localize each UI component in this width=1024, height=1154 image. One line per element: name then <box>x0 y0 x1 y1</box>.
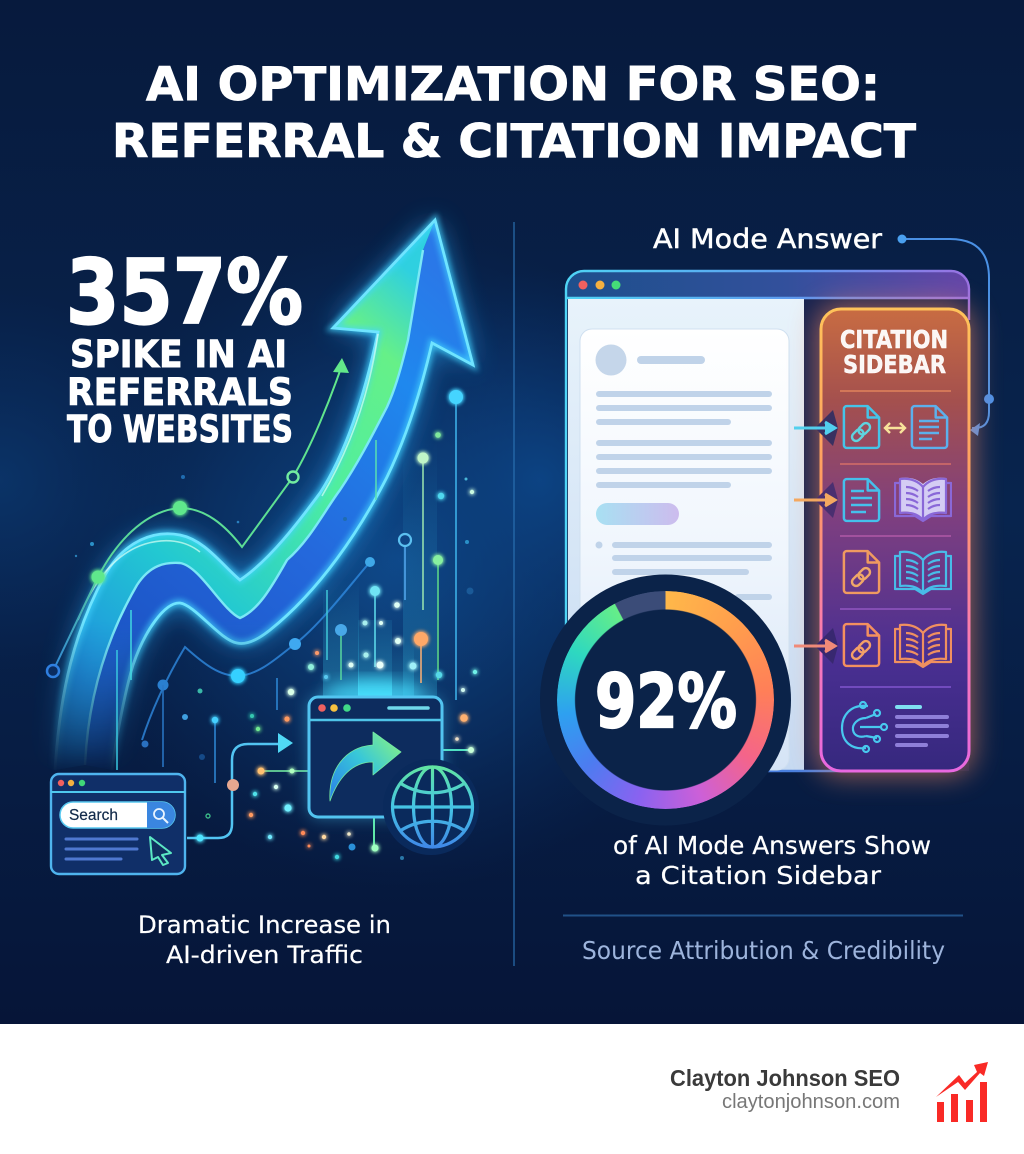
stat: 357%: REFERRALS <box>67 371 293 414</box>
source text lines <box>895 705 949 747</box>
thin trend line with nodes <box>47 358 349 677</box>
label: dramatic increase: AI-driven Traffic <box>166 941 363 969</box>
browser window with redirect arrow <box>309 697 442 817</box>
donut chart: 92%: 92% <box>595 659 737 745</box>
stat: 357%: SPIKE IN AI <box>70 333 287 376</box>
panel: citation sidebar <box>817 305 973 775</box>
answer panel <box>566 299 900 771</box>
title: REFERRAL & CITATION IMPACT <box>112 114 917 168</box>
sidebar row 3 icons <box>844 551 951 594</box>
title: AI OPTIMIZATION FOR SEO: <box>146 57 880 111</box>
brand name <box>670 1065 900 1113</box>
icon: redirect arrow <box>330 732 401 801</box>
caption: source attribution: Source Attribution & Credibility <box>582 936 945 965</box>
lower blue trend line <box>142 557 375 740</box>
search window <box>51 774 185 874</box>
light beams <box>323 440 437 708</box>
arrow lower blue band <box>85 220 473 770</box>
window title bar <box>567 272 968 298</box>
label: dramatic increase: Dramatic Increase in <box>138 911 391 939</box>
sidebar row 4 icons <box>844 624 951 667</box>
search bar: Search <box>69 807 118 824</box>
stat: 357%: 357% <box>66 240 303 344</box>
callout connector to sidebar <box>898 234 994 436</box>
sidebar row 1 icons <box>844 406 947 448</box>
sidebar heading: CITATION <box>840 325 948 354</box>
brand name: Clayton Johnson SEO <box>670 1065 900 1091</box>
caption: citation stat: a Citation Sidebar <box>635 861 882 890</box>
center divider <box>513 222 515 966</box>
icon: globe <box>383 759 479 855</box>
sidebar row 2 icons <box>844 478 951 521</box>
connector links around browser <box>258 747 474 852</box>
arrow upper green band <box>55 220 435 770</box>
growth arrow <box>55 220 473 770</box>
stat: 357% <box>66 240 303 451</box>
icon: cursor <box>150 837 171 865</box>
brand name: claytonjohnson.com <box>722 1091 900 1113</box>
connector arrow <box>187 733 293 842</box>
icon: source network <box>842 702 887 752</box>
caption: citation stat <box>613 831 931 890</box>
footer <box>0 1024 1024 1154</box>
stat: 357%: TO WEBSITES <box>67 408 293 451</box>
sidebar heading: SIDEBAR <box>843 350 946 379</box>
sidebar heading <box>840 325 948 379</box>
donut chart: 92% <box>540 574 791 826</box>
caption: citation stat: of AI Mode Answers Show <box>613 831 931 860</box>
heading: AI Mode Answer: AI Mode Answer <box>653 224 883 255</box>
logo icon <box>936 1062 988 1122</box>
citation arrows <box>794 410 838 664</box>
browser window: AI answer <box>566 271 969 771</box>
rising data pins and particles <box>75 390 477 860</box>
title <box>112 57 917 168</box>
label: dramatic increase <box>138 911 391 969</box>
